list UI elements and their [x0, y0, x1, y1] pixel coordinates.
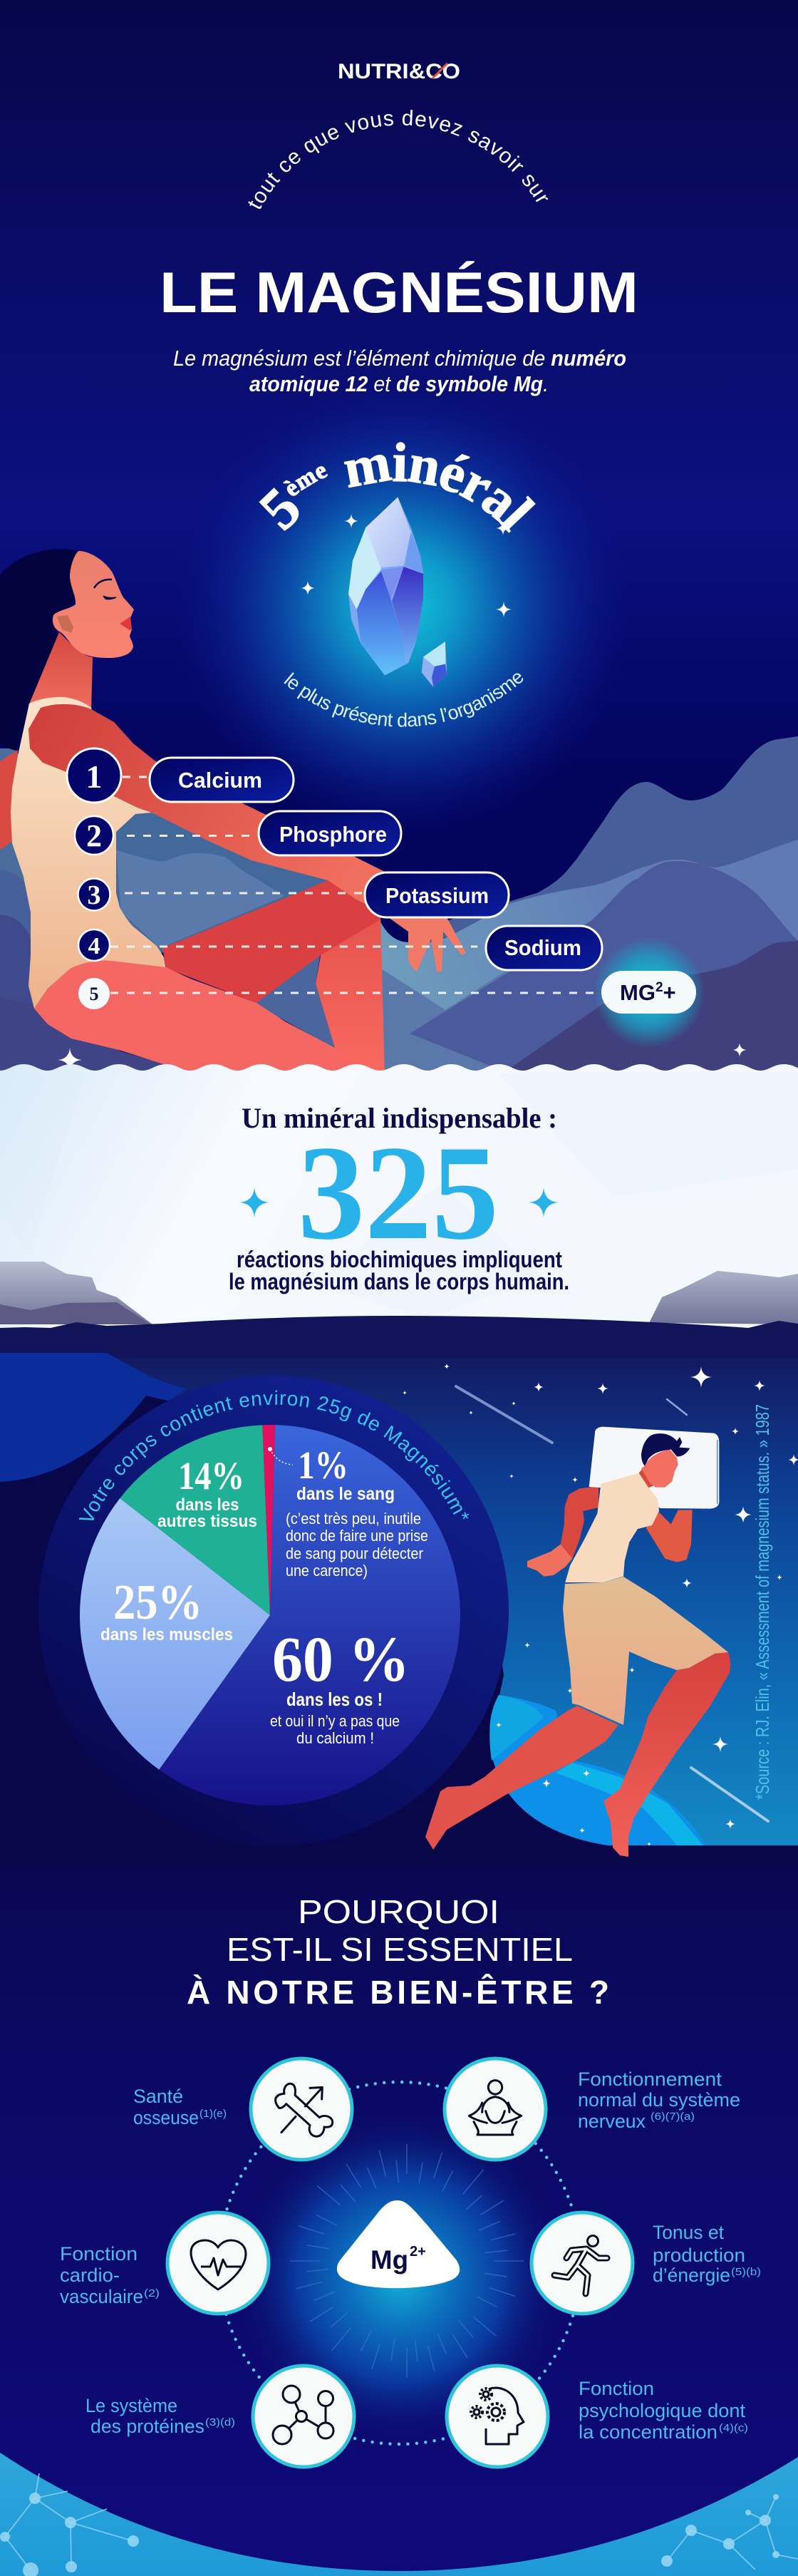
sleeper: far lower leg	[425, 1706, 618, 1850]
label: tonus et énergie	[653, 2222, 761, 2286]
woman: face	[53, 551, 134, 658]
marker 3: 3	[87, 880, 101, 910]
dashed leader lines	[110, 777, 597, 993]
big number 325: 325	[298, 1118, 499, 1268]
label: 60%	[270, 1624, 410, 1747]
woman: hair	[0, 549, 78, 751]
marker 2: 2	[86, 818, 102, 853]
pill: calcium: Calcium	[178, 768, 262, 793]
label: fonction cardio-vasculaire: cardio-	[60, 2265, 120, 2286]
label: 14%	[157, 1454, 257, 1531]
central Mg badge	[337, 2200, 460, 2288]
curved heading: 5ème minéral: ème	[283, 466, 328, 496]
ranking markers 1 to 5	[67, 748, 121, 1009]
pie slice: 14% other tissues	[120, 1425, 270, 1615]
icon: heart	[167, 2212, 269, 2314]
sleeper: pillow	[589, 1427, 719, 1509]
leader dotted line	[270, 1449, 293, 1465]
label: 60%: et oui il n’y a pas que	[270, 1712, 400, 1730]
marker 4: 4	[88, 933, 100, 959]
pill: sodium	[486, 926, 602, 970]
marker 4	[78, 929, 110, 961]
radiating rays around Mg	[290, 2144, 524, 2378]
footer curve with molecule network	[0, 2453, 798, 2576]
label: 60%: 60 %	[272, 1624, 410, 1695]
label: 1%: (c’est très peu, inutile	[286, 1510, 421, 1527]
sleeper: t-shirt	[565, 1473, 659, 1582]
label: fonction cardio-vasculaire	[60, 2243, 160, 2307]
label: système nerveux: normal du système	[578, 2089, 740, 2111]
label: système nerveux: Fonctionnement	[578, 2068, 722, 2090]
woman: ear, lips, eye	[57, 579, 132, 633]
label: 60%: du calcium !	[296, 1729, 374, 1747]
label: 25%	[100, 1575, 233, 1644]
label: système des protéines: (3)(d)	[205, 2416, 235, 2428]
pill: magnesium with glow	[594, 937, 705, 1048]
heading: un minéral indispensable: Un minéral indispensable :	[242, 1102, 557, 1134]
subtitle	[173, 346, 626, 396]
label: 14%: dans les	[175, 1495, 239, 1515]
pill: calcium	[150, 758, 294, 802]
label: système des protéines	[86, 2395, 235, 2437]
pie slice: 25% muscles	[80, 1498, 270, 1770]
label: 1%: 1%	[298, 1443, 348, 1487]
label: fonction psychologique: la concentration	[579, 2421, 717, 2443]
label: santé osseuse: (1)(e)	[200, 2108, 227, 2120]
curved intro text: tout ce que vous devez savoir sur	[248, 110, 549, 209]
label: fonction psychologique: psychologique dont	[579, 2400, 745, 2421]
curved heading: 5ème minéral: minéral	[343, 442, 536, 533]
logo: NUTRI&CO	[338, 60, 460, 83]
marker 2	[75, 816, 113, 855]
pill: potassium: Potassium	[385, 883, 489, 908]
label: fonction psychologique: (4)(c)	[719, 2422, 748, 2434]
label: système nerveux: nerveux	[578, 2111, 646, 2132]
pill: potassium	[365, 872, 509, 917]
curved caption: le plus présent dans l’organisme	[284, 672, 523, 727]
pill: magnesium with glow: MG	[620, 980, 656, 1005]
pill: sodium: Sodium	[504, 935, 581, 960]
marker 3	[78, 878, 110, 911]
dotted orbit ring	[219, 2082, 581, 2444]
subtitle: atomique 12 et de symbole Mg.	[249, 371, 549, 396]
pie slice: 60% bones	[159, 1425, 460, 1805]
sleeper: far arm	[527, 1486, 598, 1577]
label: système des protéines: Le système	[86, 2395, 177, 2416]
sleeper: near lower leg	[603, 1652, 730, 1857]
shooting stars	[456, 1386, 768, 1821]
label: fonction cardio-vasculaire: vasculaire	[60, 2286, 143, 2307]
woman: arm	[28, 704, 399, 919]
sleeper: shorts	[563, 1577, 728, 1725]
woman: hand	[385, 891, 466, 972]
icon: head with gears	[447, 2366, 548, 2467]
white section	[0, 1064, 798, 1347]
mineral pills	[150, 758, 705, 1048]
label: système des protéines: des protéines	[90, 2416, 204, 2437]
section 3 background	[0, 1845, 798, 2576]
woman in profile	[0, 549, 466, 1076]
stars around crystal	[58, 514, 747, 1072]
source note: *Source : RJ. Elin, « Assessment of magnesium status. » 1987	[752, 1404, 773, 1800]
woman: neck	[28, 632, 93, 711]
subtitle: Le magnésium est l’élément chimique de numéro	[173, 346, 626, 371]
icon: runner	[532, 2212, 633, 2314]
label: 25%: dans les muscles	[100, 1625, 233, 1644]
pill: magnesium with glow: +	[663, 980, 676, 1005]
label: système nerveux: (6)(7)(a)	[651, 2111, 695, 2123]
icon: molecule	[253, 2366, 354, 2467]
marker 1: 1	[86, 758, 103, 795]
heading: pourquoi: À NOTRE BIEN-ÊTRE ?	[187, 1974, 609, 2011]
label: 1%: donc de faire une prise	[286, 1527, 428, 1545]
label: 1%: de sang pour détecter	[286, 1545, 423, 1562]
label: tonus et énergie: (5)(b)	[731, 2266, 761, 2278]
label: fonction cardio-vasculaire: Fonction	[60, 2243, 138, 2265]
woman: raised thigh	[162, 880, 380, 1003]
label: 1%: dans le sang	[296, 1484, 395, 1504]
woman: swimsuit torso	[11, 697, 166, 1009]
marker 5: 5	[90, 984, 98, 1004]
planet behind sleeper	[489, 1695, 705, 1845]
pill: phosphore: Phosphore	[279, 822, 387, 847]
heading: pourquoi: POURQUOI	[298, 1893, 499, 1930]
title: LE MAGNÉSIUM	[160, 260, 638, 325]
curved label on pie: Votre corps contient environ 25g de Magnésium*	[78, 1390, 469, 1520]
marker 1	[67, 748, 121, 803]
stars in night scene	[403, 1364, 798, 1846]
label: tonus et énergie: production	[653, 2245, 745, 2266]
text: reactions: le magnésium dans le corps humain.	[229, 1269, 569, 1294]
pill: magnesium with glow: 2	[656, 980, 663, 995]
sleeper: near arm	[646, 1510, 693, 1562]
label: fonction psychologique: Fonction	[579, 2378, 654, 2399]
woman: shin of raised leg	[316, 880, 385, 1076]
label: système nerveux	[578, 2068, 740, 2132]
label: 14%: 14%	[178, 1454, 244, 1498]
central Mg badge: 2+	[410, 2244, 426, 2260]
curved heading: 5ème minéral	[259, 442, 536, 533]
label: tonus et énergie: Tonus et	[653, 2222, 724, 2243]
marker 5	[78, 978, 110, 1009]
label: tonus et énergie: d’énergie	[653, 2265, 730, 2286]
text: reactions: réactions biochimiques impliquent	[237, 1247, 562, 1272]
heading: pourquoi: EST-IL SI ESSENTIEL	[227, 1931, 573, 1968]
night scene background	[0, 1316, 798, 1867]
curved heading: 5ème minéral: 5	[259, 488, 299, 531]
central glow	[233, 2110, 568, 2445]
label: fonction cardio-vasculaire: (2)	[144, 2287, 160, 2299]
pill: phosphore	[259, 811, 401, 855]
sleeper: neck and head	[639, 1433, 690, 1488]
label: 1%: une carence)	[286, 1562, 368, 1580]
mountains, top section	[0, 736, 798, 1076]
central Mg badge: Mg	[370, 2245, 408, 2274]
label: 1%	[286, 1443, 428, 1580]
label: 14%: autres tissus	[157, 1512, 257, 1531]
label: santé osseuse: osseuse	[133, 2107, 199, 2128]
label: 25%: 25%	[113, 1575, 202, 1630]
woman: foreground thigh	[34, 960, 370, 1076]
label: santé osseuse	[133, 2086, 227, 2128]
icon: meditation	[445, 2059, 546, 2160]
icon: bone health	[251, 2059, 352, 2160]
label: santé osseuse: Santé	[133, 2086, 183, 2107]
label: fonction psychologique	[579, 2378, 748, 2443]
night sky background with crystal glow	[0, 0, 798, 1078]
grey mountains at the foot of white section	[0, 1262, 798, 1324]
sparkles beside number	[239, 1187, 559, 1217]
pie slice: 1% blood	[262, 1425, 275, 1615]
pie chart with ring	[38, 1376, 509, 1846]
heading: pourquoi	[187, 1893, 609, 2011]
icon: magnesium crystal	[348, 497, 447, 687]
label: 60%: dans les os !	[286, 1689, 383, 1710]
sleeping figure	[425, 1427, 730, 1857]
text: reactions	[229, 1247, 569, 1294]
